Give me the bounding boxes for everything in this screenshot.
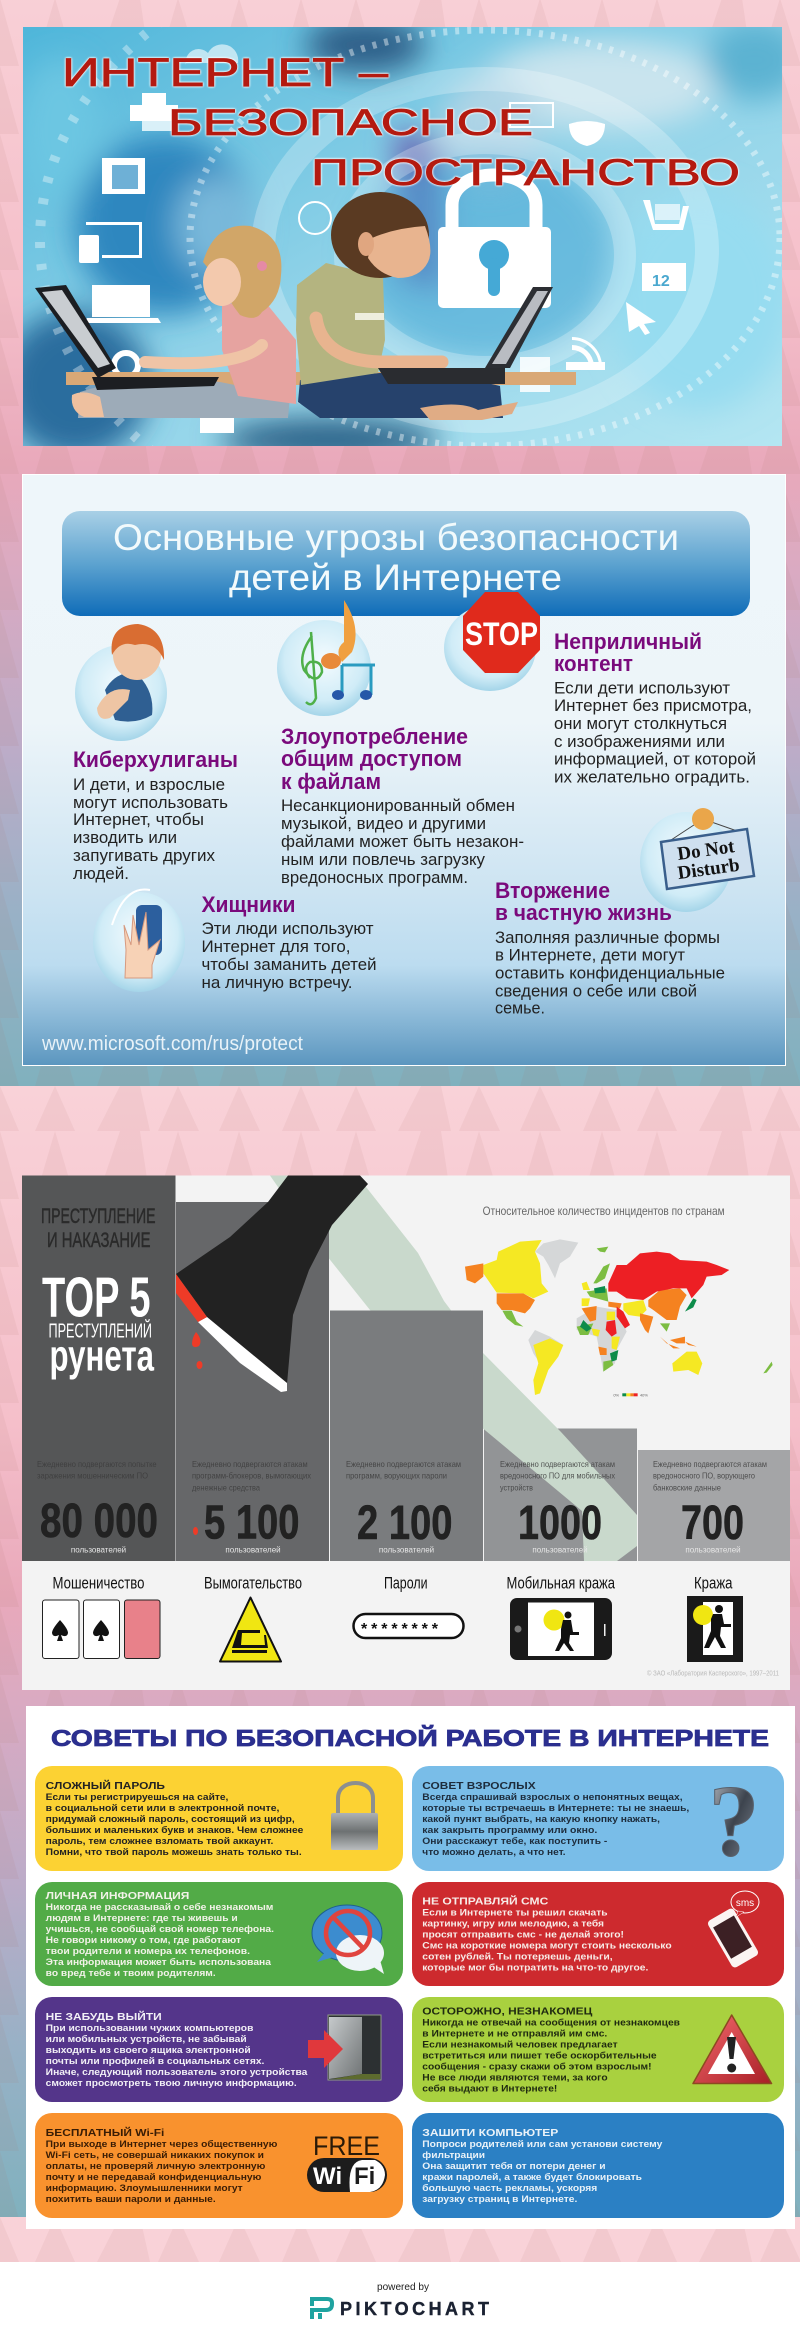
icon: question mark: ? — [708, 1765, 760, 1878]
block: file sharing abuse: файлами может быть незакон- — [281, 833, 524, 851]
card: beware strangers: в Интернете и не отправляй им смс. — [422, 2028, 607, 2038]
category labels: Кража — [694, 1574, 733, 1593]
card: strong password: в социальной сети или в электронной почте, — [46, 1803, 279, 1813]
block: predators: Интернет для того, — [202, 938, 350, 956]
card: protect computer: Она защитит тебя от потери денег и — [422, 2161, 606, 2171]
header banner — [62, 511, 750, 616]
icon: stop sign — [444, 592, 540, 691]
card: free wifi: похитить ваши пароли и данные. — [46, 2194, 216, 2204]
numbers: 80 000 — [40, 1495, 158, 1548]
block: file sharing abuse: Несанкционированный обмен — [281, 797, 515, 815]
block: indecent content — [554, 629, 756, 786]
block: indecent content: они могут столкнуться — [554, 715, 727, 733]
card: personal info: Никогда не рассказывай о себе незнакомым — [46, 1902, 274, 1912]
heading: top 5: рунета — [50, 1332, 154, 1381]
bar: column 3 — [330, 1310, 483, 1561]
numbers: 1000 — [518, 1497, 602, 1550]
category labels: Мошеничество — [52, 1574, 144, 1593]
icon: smartphone sms — [707, 1891, 759, 1969]
column captions: Ежедневно подвергаются попытке — [37, 1459, 157, 1469]
card: personal info: ЛИЧНАЯ ИНФОРМАЦИЯ — [46, 1891, 189, 1902]
source url: www.microsoft.com/rus/protect — [41, 1033, 303, 1055]
block: privacy invasion: в Интернете, дети могут — [495, 946, 685, 964]
card: do not send sms: которые мог бы потратить на что-то другое. — [422, 1963, 648, 1973]
block: predators: Эти люди используют — [202, 920, 374, 938]
card: log out: выходить из своего ящика электронной — [46, 2045, 251, 2055]
card: log out — [35, 1997, 403, 2102]
card: do not send sms: Если в Интернете ты решил скачать — [422, 1908, 608, 1918]
icon: padlock — [331, 1783, 378, 1850]
block: indecent content: Интернет без присмотра, — [554, 697, 752, 715]
world map: 0% — [613, 1392, 620, 1397]
card: do not send sms: Смс на короткие номера могут стоить несколько — [422, 1941, 672, 1951]
axe head — [176, 1176, 368, 1535]
panel: hero illustration — [23, 27, 782, 446]
card: protect computer: большую часть рекламы, ускоряя — [422, 2183, 597, 2193]
card: ask adults: какой пункт выбрать, на какую кнопку нажать, — [422, 1814, 660, 1824]
category labels: Мобильная кража — [506, 1574, 615, 1593]
block: cyberbullies: Интернет, чтобы — [73, 811, 204, 829]
title: БЕЗОПАСНОЕ — [168, 102, 533, 143]
card: free wifi: оплаты, не проверяй личную электронную — [46, 2161, 265, 2171]
card: personal info — [35, 1882, 403, 1986]
card: beware strangers: Если незнакомый человек предлагает — [422, 2039, 618, 2049]
card: protect computer: ЗАШИТИ КОМПЬЮТЕР — [422, 2128, 559, 2139]
block: privacy invasion: семье. — [495, 1000, 545, 1018]
category labels: Пароли — [384, 1574, 428, 1593]
icon: free wifi: FREE — [313, 2131, 380, 2161]
block: privacy invasion: Вторжение — [495, 878, 610, 903]
column captions: денежные средства — [192, 1482, 260, 1492]
boy with laptop — [296, 192, 553, 420]
card: personal info: во вред тебе и твоим родителям. — [46, 1968, 216, 1978]
icon: warning triangle — [693, 2015, 772, 2084]
icon: free wifi: Wi — [313, 2163, 342, 2190]
block: privacy invasion: Заполняя различные формы — [495, 929, 720, 947]
column captions: Ежедневно подвергаются атакам — [192, 1459, 308, 1469]
footer: piktochart branding: PIKTOCHART — [340, 2299, 489, 2319]
card: do not send sms: сотен рублей. Ты потеряешь деньги, — [422, 1952, 613, 1962]
icon: mobile theft — [510, 1598, 612, 1660]
card: protect computer — [412, 2113, 784, 2218]
block: indecent content: их желательно оградить. — [554, 768, 750, 786]
block: indecent content: контент — [554, 651, 633, 676]
block: file sharing abuse: общим доступом — [281, 746, 462, 771]
icon: piktochart logo — [312, 2299, 332, 2319]
block: cyberbullies — [73, 747, 238, 883]
category labels: Вымогательство — [204, 1574, 302, 1593]
block: predators — [202, 892, 376, 992]
world map: 40% — [640, 1392, 648, 1397]
world map — [465, 1239, 773, 1397]
card: strong password — [35, 1766, 403, 1871]
title — [62, 51, 740, 193]
block: file sharing abuse: вредоносных программ. — [281, 869, 468, 887]
heading: top 5 — [42, 1266, 154, 1381]
card: strong password: придумай сложный пароль, состоящий из цифр, — [46, 1814, 295, 1824]
bar: column 2 — [176, 1202, 329, 1561]
block: indecent content: Если дети используют — [554, 680, 730, 698]
wooden shelf — [66, 372, 576, 385]
tips title: СОВЕТЫ ПО БЕЗОПАСНОЙ РАБОТЕ В ИНТЕРНЕТЕ — [51, 1724, 769, 1751]
title: ПРОСТРАНСТВО — [311, 152, 740, 193]
heading: crime and punishment: И НАКАЗАНИЕ — [47, 1229, 150, 1252]
card: log out: или мобильных устройств, не забывай — [46, 2034, 247, 2044]
icon: do not disturb: Disturb — [676, 855, 741, 884]
column captions: банковские данные — [653, 1482, 721, 1492]
card: free wifi — [35, 2113, 403, 2218]
card: free wifi: При выходе в Интернет через общественную — [46, 2139, 277, 2149]
column captions: вредоносного ПО, ворующего — [653, 1470, 755, 1480]
block: cyberbullies: Киберхулиганы — [73, 747, 238, 772]
icon: exit door — [308, 2015, 381, 2080]
heading: top 5: TOP 5 — [42, 1266, 150, 1330]
panel: main threats — [22, 474, 786, 1066]
title: ИНТЕРНЕТ – — [62, 51, 389, 95]
icon: password field: ******** — [361, 1621, 439, 1638]
panel: top 5 crimes — [22, 1176, 790, 1690]
footer: piktochart branding — [312, 2281, 489, 2319]
card: personal info: людям в Интернете: где ты живешь и — [46, 1913, 238, 1923]
card: log out: При использовании чужих компьютеров — [46, 2023, 254, 2033]
card: beware strangers: сообщения - сразу скажи об этом взрослым! — [422, 2061, 652, 2071]
header banner: детей в Интернете — [229, 557, 562, 598]
card: ask adults: которые ты встречаешь в Интернете: ты не знаешь, — [422, 1803, 689, 1813]
icon: stop sign: STOP — [465, 616, 538, 652]
card: ask adults — [412, 1765, 784, 1878]
card: ask adults: что можно делать, а что нет. — [422, 1847, 566, 1857]
bar: column 5 — [638, 1450, 790, 1561]
block: indecent content: Неприличный — [554, 629, 702, 654]
card: beware strangers: Никогда не отвечай на сообщения от незнакомцев — [422, 2017, 680, 2027]
block: indecent content: с изображениями или — [554, 733, 725, 751]
card: strong password: СЛОЖНЫЙ ПАРОЛЬ — [46, 1779, 165, 1792]
icon: extortion warning — [220, 1598, 281, 1662]
card: log out: почты или профилей в социальных сетях. — [46, 2056, 264, 2066]
column captions: устройств — [500, 1482, 533, 1492]
card: strong password: Помни, что твой пароль можешь знать только ты. — [46, 1847, 302, 1857]
card: free wifi: почту и не передавай конфиденциальную — [46, 2172, 261, 2182]
column captions: программ, ворующих пароли — [346, 1470, 447, 1480]
card: ask adults: Они расскажут тебе, как поступить - — [422, 1836, 607, 1846]
panel: hero illustration: 12 — [652, 273, 670, 290]
card: free wifi: Wi-Fi сеть, не совершай никаких покупок и — [46, 2150, 264, 2160]
heading: crime and punishment: ПРЕСТУПЛЕНИЕ — [41, 1205, 156, 1228]
icon: cyberbully — [75, 624, 167, 741]
block: file sharing abuse: музыкой, видео и другими — [281, 815, 486, 833]
icon: free wifi — [307, 2131, 387, 2192]
unit labels: пользователей — [71, 1546, 126, 1554]
card: free wifi: информацию. Злоумышленники могут — [46, 2183, 243, 2193]
column captions: Ежедневно подвергаются атакам — [346, 1459, 461, 1469]
icon: smartphone sms: sms — [736, 1898, 754, 1909]
numbers: 2 100 — [357, 1497, 452, 1550]
card: personal info: Не говори никому о том, где работают — [46, 1935, 241, 1945]
card: do not send sms: просят отправить смс - не делай этого! — [422, 1930, 624, 1940]
card: strong password: больших и маленьких букв и знаков. Чем сложнее — [46, 1825, 303, 1835]
block: privacy invasion: оставить конфиденциальные — [495, 964, 725, 982]
map title: Относительное количество инцидентов по странам — [483, 1204, 725, 1218]
card: beware strangers: Не все люди являются теми, за кого — [422, 2072, 608, 2082]
card: log out: сможет просмотреть твою личную информацию. — [46, 2078, 297, 2088]
bar: column 4 — [484, 1428, 637, 1561]
block: predators: Хищники — [202, 892, 296, 917]
block: predators: на личную встречу. — [202, 974, 352, 992]
card: strong password: пароль, тем сложнее взломать твой аккаунт. — [46, 1836, 273, 1846]
card: protect computer: кражи паролей, а также будет блокировать — [422, 2172, 642, 2182]
unit labels: пользователей — [379, 1546, 434, 1554]
card: personal info: учишься, не сообщай свой номер телефона. — [46, 1924, 274, 1934]
card: protect computer: фильтрации — [422, 2150, 485, 2160]
card: beware strangers — [412, 1997, 784, 2102]
icon: theft exit — [687, 1596, 743, 1662]
block: cyberbullies: могут использовать — [73, 794, 228, 812]
card: ask adults: Всегда спрашивай взрослых о непонятных вещах, — [422, 1792, 683, 1802]
block: indecent content: информацией, от которой — [554, 750, 756, 768]
card: do not send sms: картинку, игру или мелодию, а тебя — [422, 1919, 604, 1929]
column captions — [37, 1459, 767, 1492]
block: privacy invasion — [495, 878, 725, 1018]
column captions: программ-блокеров, вымогающих — [192, 1470, 312, 1480]
block: predators: чтобы заманить детей — [202, 956, 376, 974]
block: privacy invasion: сведения о себе или свой — [495, 982, 697, 1000]
unit labels: пользователей — [685, 1546, 741, 1554]
panel: safety tips — [26, 1706, 795, 2229]
icon: forbidden chat — [312, 1905, 384, 1974]
icon: playing cards — [42, 1600, 160, 1658]
column captions: заражения мошенническим ПО — [37, 1470, 148, 1480]
block: cyberbullies: И дети, и взрослые — [73, 776, 225, 794]
girl with laptop — [35, 226, 296, 418]
unit labels: пользователей — [532, 1546, 588, 1554]
card: beware strangers: встретиться или пишет тебе оскорбительные — [422, 2050, 657, 2060]
icon: do not disturb — [640, 808, 754, 912]
card: strong password: Если ты регистрируешься на сайте, — [46, 1792, 228, 1802]
block: file sharing abuse: к файлам — [281, 769, 381, 794]
card: free wifi: БЕСПЛАТНЫЙ Wi-Fi — [46, 2126, 165, 2139]
block: file sharing abuse: Злоупотребление — [281, 724, 468, 749]
icon: free wifi: Fi — [354, 2163, 375, 2190]
block: cyberbullies: запугивать других — [73, 847, 216, 865]
column captions: Ежедневно подвергаются атакам — [500, 1459, 615, 1469]
heading: top 5: ПРЕСТУПЛЕНИЙ — [48, 1319, 152, 1343]
card: ask adults: как закрыть программу или окно. — [422, 1825, 597, 1835]
bar: column 1 — [22, 1176, 176, 1561]
category labels — [52, 1574, 733, 1593]
block: file sharing abuse: ным или повлечь загрузку — [281, 851, 486, 869]
icon: music notes — [277, 600, 375, 716]
footer: piktochart branding: powered by — [377, 2281, 430, 2293]
block: cyberbullies: людей. — [73, 865, 129, 883]
axe handle — [270, 1176, 637, 1561]
numbers — [40, 1495, 744, 1550]
block: privacy invasion: в частную жизнь — [495, 900, 672, 925]
icon: padlock — [438, 175, 551, 308]
icon: do not disturb: Do Not — [676, 836, 737, 865]
card: protect computer: загрузку страниц в Интернете. — [422, 2194, 577, 2204]
card: beware strangers: себя выдают в Интернете! — [422, 2083, 557, 2093]
unit labels — [71, 1546, 741, 1554]
column captions: вредоносного ПО для мобильных — [500, 1470, 616, 1480]
card: log out: Иначе, следующий пользователь этого устройства — [46, 2067, 308, 2077]
icon: hand on mouse — [93, 889, 185, 992]
icon: password field — [354, 1614, 464, 1638]
card: do not send sms — [412, 1882, 784, 1986]
block: file sharing abuse — [281, 724, 524, 887]
card: protect computer: Попроси родителей или сам установи систему — [422, 2139, 663, 2149]
card: personal info: твои родители и номера их телефонов. — [46, 1946, 250, 1956]
column captions: Ежедневно подвергаются атакам — [653, 1459, 767, 1469]
numbers: 5 100 — [204, 1496, 300, 1550]
header banner: Основные угрозы безопасности — [113, 517, 679, 558]
card: do not send sms: НЕ ОТПРАВЛЯЙ СМС — [422, 1895, 548, 1908]
card: ask adults: СОВЕТ ВЗРОСЛЫХ — [422, 1781, 536, 1792]
block: cyberbullies: изводить или — [73, 829, 177, 847]
icons: white technology symbols — [79, 44, 689, 433]
heading: crime and punishment — [41, 1205, 156, 1252]
numbers: 700 — [681, 1497, 744, 1550]
card: personal info: Эта информация может быть использована — [46, 1957, 272, 1967]
card: log out: НЕ ЗАБУДЬ ВЫЙТИ — [46, 2010, 162, 2023]
card: beware strangers: ОСТОРОЖНО, НЕЗНАКОМЕЦ — [422, 2006, 593, 2017]
unit labels: пользователей — [225, 1546, 281, 1554]
